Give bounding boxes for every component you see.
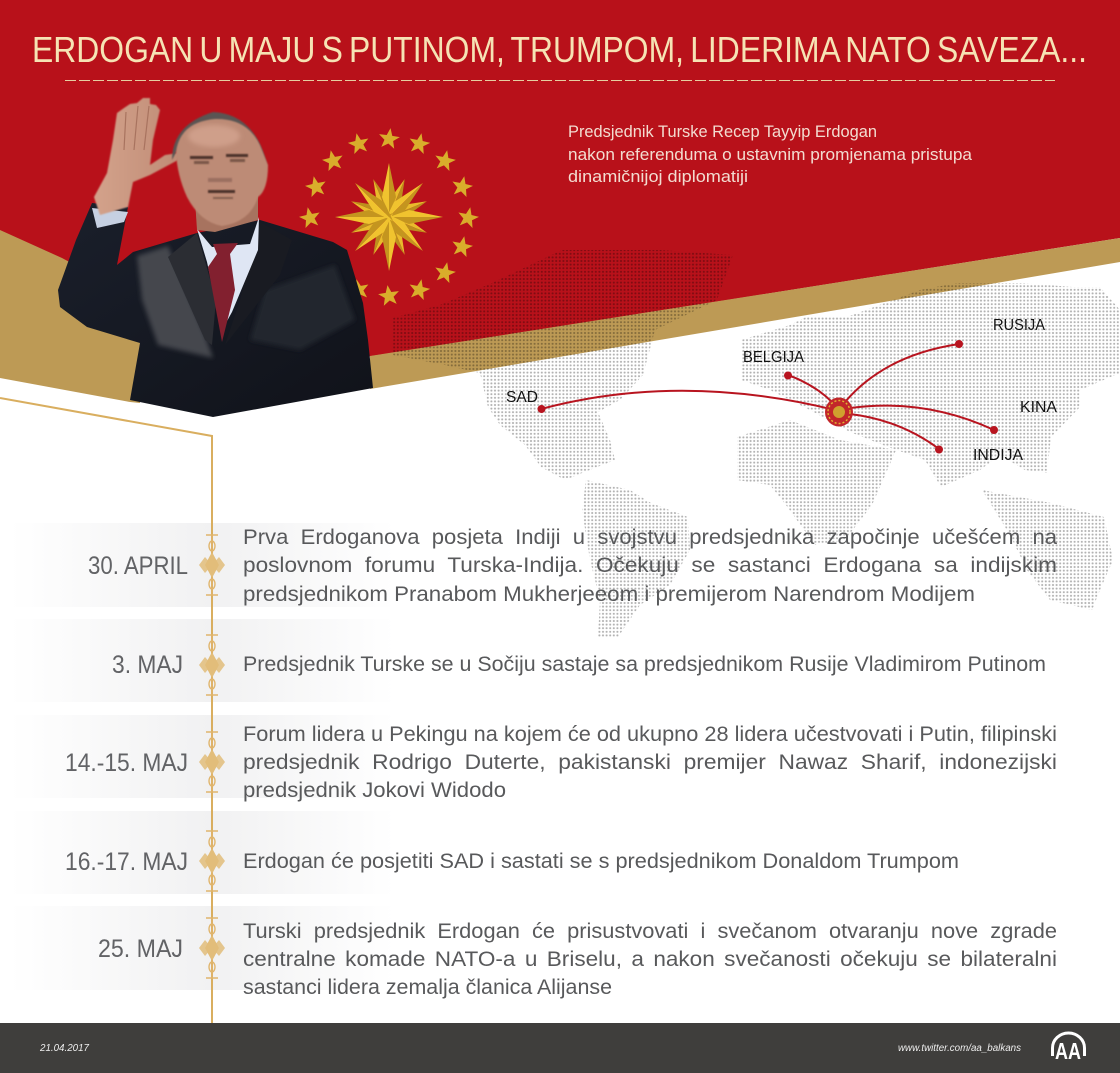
icon: presidential emblem bbox=[297, 127, 481, 306]
face bbox=[176, 119, 268, 226]
event: 25 May: sastanci lidera zemalja članica Alijanse bbox=[243, 975, 612, 999]
red header background bbox=[0, 0, 1120, 400]
gold band right bbox=[370, 238, 1120, 389]
footer date: 21.04.2017 bbox=[39, 1043, 89, 1054]
lapel bbox=[168, 233, 216, 345]
event: 14-15 May bbox=[65, 722, 1057, 802]
event: 3 May: 3. MAJ bbox=[112, 651, 183, 679]
hand bbox=[94, 98, 178, 215]
event: 25 May: 25. MAJ bbox=[98, 935, 183, 963]
event: 25 May: centralne komade NATO-a u Briselu, a nakon svečanosti očekuju se bilateralni bbox=[243, 947, 1057, 971]
shirt bbox=[197, 217, 259, 330]
event: 14-15 May: predsjednik Jokovi Widodo bbox=[243, 778, 506, 802]
dashed divider bbox=[65, 80, 1055, 82]
event: 16-17 May: Erdogan će posjetiti SAD i sastati se s predsjednikom Donaldom Trumpom bbox=[243, 849, 959, 873]
event: 16-17 May: 16.-17. MAJ bbox=[65, 848, 188, 876]
map: North America bbox=[393, 250, 733, 480]
route arcs bbox=[541, 344, 994, 449]
country labels: RUSIJA bbox=[993, 317, 1045, 334]
tie bbox=[208, 243, 238, 342]
hub emblem bbox=[825, 398, 853, 426]
event: 14-15 May: predsjednik Rodrigo Duterte, pakistanski premijer Nawaz Sharif, indonezijski bbox=[243, 750, 1057, 774]
gold band left bbox=[0, 230, 140, 403]
suit jacket bbox=[58, 203, 373, 417]
intro text: Predsjednik Turske Recep Tayyip Erdogan bbox=[568, 123, 877, 141]
event: 14-15 May: Forum lidera u Pekingu na kojem će od ukupno 28 lidera učestvovati i Putin, filipinski bbox=[243, 722, 1057, 746]
neck bbox=[195, 195, 258, 232]
footer bar bbox=[0, 1023, 1120, 1073]
country labels: KINA bbox=[1020, 399, 1057, 416]
map: Africa bbox=[737, 420, 896, 545]
gold timeline line bbox=[0, 398, 212, 1023]
event: 25 May bbox=[98, 919, 1057, 999]
hair bbox=[172, 112, 267, 165]
event: 16-17 May bbox=[65, 848, 959, 876]
event: 14-15 May: 14.-15. MAJ bbox=[65, 749, 188, 777]
lapel right bbox=[225, 222, 292, 345]
timeline row backgrounds bbox=[10, 523, 395, 990]
map: Eurasia bbox=[741, 283, 1120, 487]
route map bbox=[506, 317, 1057, 464]
dotted world map bbox=[393, 250, 1120, 637]
event: 30 April bbox=[88, 525, 1057, 606]
intro text: nakon referenduma o ustavnim promjenama pristupa bbox=[568, 146, 973, 164]
suit highlight bbox=[137, 246, 213, 358]
country labels bbox=[506, 317, 1057, 464]
country labels: BELGIJA bbox=[743, 349, 804, 366]
icon: AA logo: AA bbox=[1055, 1038, 1081, 1064]
event: 30 April: predsjednikom Pranabom Mukherjeeom i premijerom Narendrom Modijem bbox=[243, 582, 975, 606]
event: 30 April: Prva Erdoganova posjeta Indiji u svojstvu predsjednika započinje učešćem na bbox=[243, 525, 1057, 549]
intro text: dinamičnijoj diplomatiji bbox=[568, 168, 748, 186]
finger gaps bbox=[124, 106, 149, 150]
forehead light bbox=[188, 125, 240, 147]
suit right highlight bbox=[250, 265, 355, 350]
route endpoints bbox=[538, 340, 998, 454]
map: Indonesia and Australia bbox=[982, 490, 1113, 610]
footer url: www.twitter.com/aa_balkans bbox=[898, 1043, 1021, 1054]
country labels: SAD bbox=[506, 389, 538, 406]
intro text bbox=[568, 123, 973, 186]
shirt cuff bbox=[92, 208, 128, 228]
portrait of Erdogan waving bbox=[58, 98, 373, 417]
event: 25 May: Turski predsjednik Erdogan će prisustvovati i svečanom otvaranju nove zgrade bbox=[243, 919, 1057, 943]
map: South America bbox=[582, 480, 690, 637]
event: 30 April: 30. APRIL bbox=[88, 552, 188, 580]
event: 3 May: Predsjednik Turske se u Sočiju sastaje sa predsjednikom Rusije Vladimirom Putinom bbox=[243, 652, 1046, 676]
timeline ornaments bbox=[199, 535, 225, 978]
facial features bbox=[190, 154, 248, 199]
event: 30 April: poslovnom forumu Turska-Indija. Očekuju se sastanci Erdogana sa indijskim bbox=[243, 553, 1057, 577]
country labels: INDIJA bbox=[973, 447, 1023, 464]
